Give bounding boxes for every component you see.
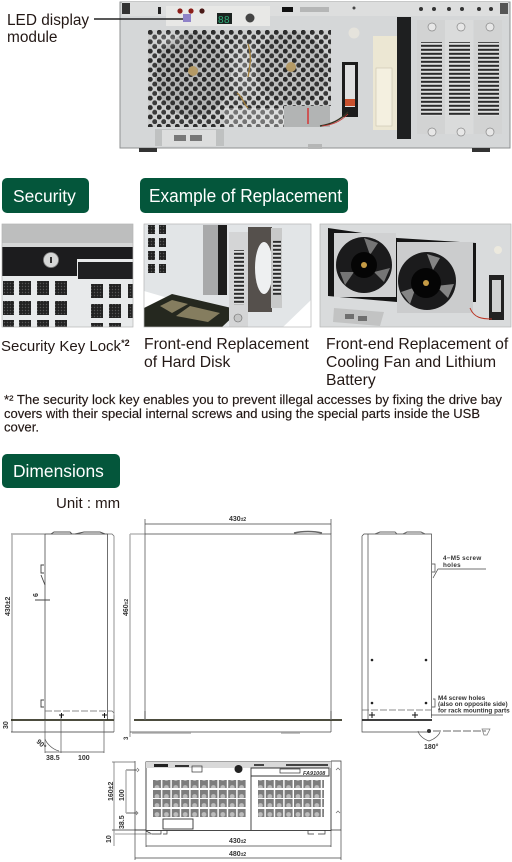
callout: 4-M5 screw holes — [443, 555, 482, 569]
heading: Security: Security — [13, 186, 76, 206]
dimension labels: left side view: 90° — [35, 738, 48, 751]
caption: cooling fan and lithium battery — [326, 336, 509, 389]
callout: 4-M5 screw holes: 4−M5 screw — [443, 555, 482, 562]
drawing: front view outline (top side) — [130, 519, 342, 737]
caption: cooling fan and lithium battery: Front-end Replacement of — [326, 336, 509, 353]
dimension labels: front elevation — [106, 781, 246, 858]
unit note: Unit : mm — [56, 495, 120, 512]
dimension labels: left side view: 430±2 — [5, 596, 12, 616]
dimension labels: front elevation: 38.5 — [119, 815, 126, 829]
LED display panel — [166, 6, 270, 26]
dimension labels: front view: 3 — [124, 736, 130, 740]
heading: Security — [2, 178, 89, 213]
USB ports — [155, 129, 224, 146]
fan grille — [144, 28, 360, 127]
dimension labels: left side view — [3, 593, 90, 762]
dimension label: 180 degrees: 180° — [424, 743, 439, 751]
callout: M4 screw holes — [438, 695, 510, 714]
caption: security key lock: Security Key Lock — [1, 338, 121, 355]
drawing: front elevation — [112, 761, 341, 860]
heading: Example of Replacement: Example of Replacement — [149, 186, 342, 206]
caption: hard disk replacement — [144, 336, 309, 371]
drawing: right side view — [362, 532, 503, 741]
label: LED display module — [7, 12, 183, 46]
footnote: covers with their special internal screws and using the special parts inside the USB — [4, 407, 480, 421]
dimension labels: front elevation: 100 — [119, 789, 126, 801]
callout: M4 screw holes: M4 screw holes — [438, 695, 486, 702]
callout: 4-M5 screw holes: holes — [443, 562, 461, 569]
footnote — [4, 393, 503, 434]
dimension labels: front view — [123, 516, 246, 740]
LED display panel: 88 — [218, 15, 230, 26]
label: LED display module: module — [7, 29, 57, 46]
heading: Dimensions: Dimensions — [13, 461, 104, 481]
callout: M4 screw holes: (also on opposite side) — [438, 701, 508, 708]
photo: chassis front with covers removed — [120, 2, 510, 152]
dimension labels: left side view: 6 — [33, 593, 40, 597]
caption: hard disk replacement: of Hard Disk — [144, 354, 230, 371]
caption: cooling fan and lithium battery: Battery — [326, 372, 376, 389]
dimension labels: front view: 430±2 — [229, 516, 246, 523]
footnote: *² The security lock key enables you to prevent illegal accesses by fixing the drive bay — [4, 393, 503, 407]
caption: security key lock: *2 — [121, 338, 130, 348]
drawing: front elevation: FA91008 — [303, 771, 326, 777]
dimension labels: front elevation: 430±2 — [229, 838, 246, 845]
caption: cooling fan and lithium battery: Cooling Fan and Lithium — [326, 354, 496, 371]
dimension labels: front elevation: 160±2 — [108, 781, 115, 801]
footnote: cover. — [4, 420, 39, 434]
photo: security key lock — [2, 224, 133, 327]
photo: cooling fan and lithium battery replacement — [320, 224, 511, 327]
label: LED display module: LED display — [7, 12, 89, 29]
dimension labels: left side view: 38.5 — [46, 755, 60, 762]
lithium battery — [320, 62, 358, 126]
dimension labels: left side view: 100 — [78, 755, 90, 762]
optical drive — [397, 17, 411, 139]
dimension labels: front view: 460±2 — [123, 599, 130, 616]
callout: M4 screw holes: for rack mounting parts — [438, 708, 510, 714]
floppy drive — [373, 36, 397, 130]
drive bay covers — [417, 20, 502, 136]
drawing: left side view — [11, 532, 114, 753]
dimension labels: left side view: 30 — [3, 721, 10, 729]
photo: hard disk replacement — [144, 224, 311, 327]
dimension labels: front elevation: 480±2 — [229, 851, 246, 858]
heading: Dimensions — [2, 454, 120, 488]
dimension labels: front elevation: 10 — [106, 835, 113, 843]
caption: hard disk replacement: Front-end Replacement — [144, 336, 309, 353]
heading: Example of Replacement — [140, 178, 348, 213]
